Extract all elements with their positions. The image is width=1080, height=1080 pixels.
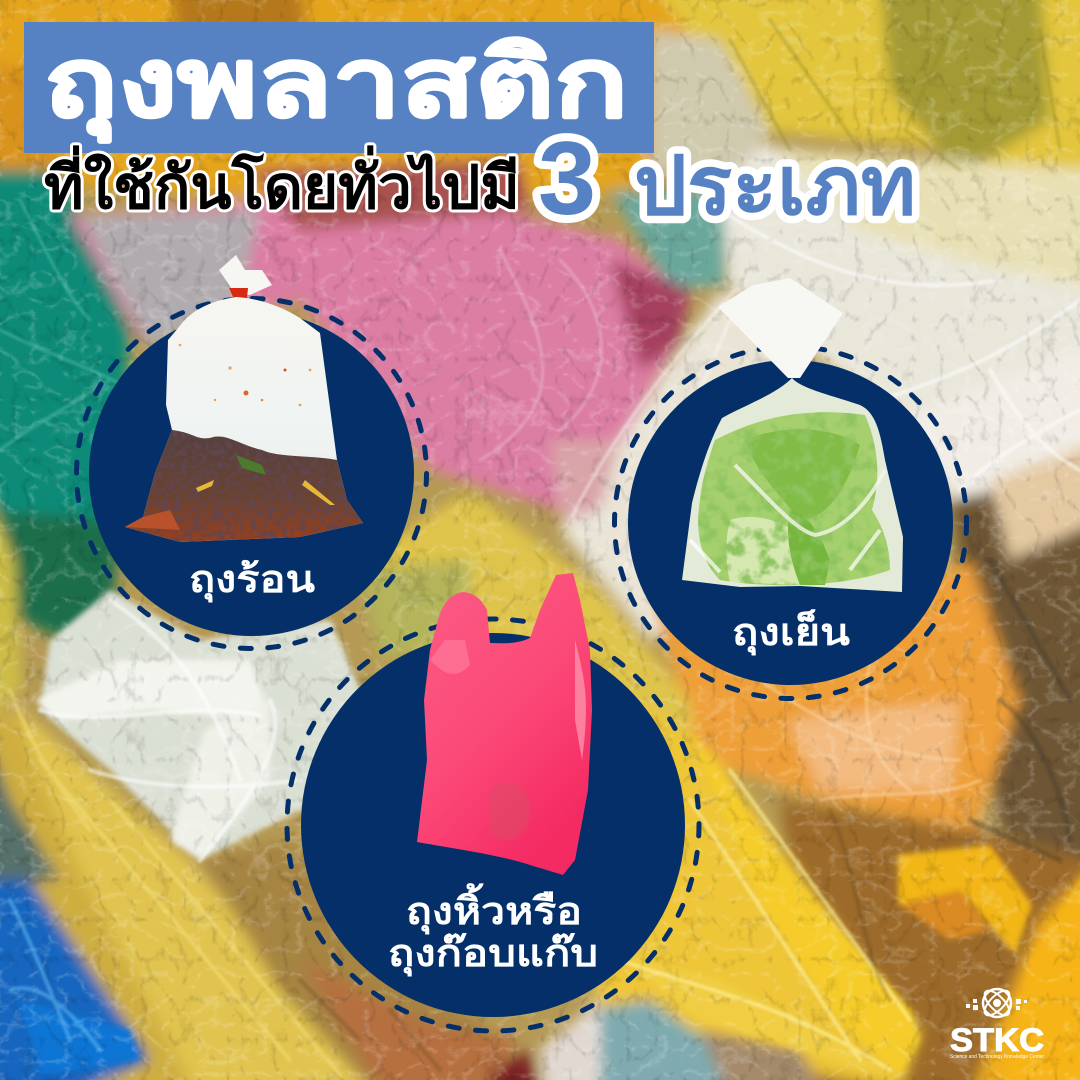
circle: cold bag <box>628 360 953 685</box>
icon: cold bag with lettuce <box>682 278 903 595</box>
subtitle: black text with white outline: ที่ใช้กันโดยทั่วไปมี <box>44 145 520 221</box>
subtitle: ประเภท: ประเภท <box>634 141 916 232</box>
icon: atom network emblem <box>966 987 1027 1019</box>
panel: hot bag <box>76 255 426 648</box>
icon: hot bag with food <box>120 255 370 545</box>
wordmark: STKC <box>950 1022 1044 1058</box>
label: ถุงหิ้วหรือ: ถุงหิ้วหรือ <box>406 883 582 935</box>
circle: carrier bag <box>301 633 685 1017</box>
label: ถุงก๊อบแก๊บ: ถุงก๊อบแก๊บ <box>388 933 598 977</box>
label: ถุงร้อน: ถุงร้อน <box>189 559 315 603</box>
dashed ring: hot bag <box>76 298 426 648</box>
title: main heading: ถุงพลาสติก <box>44 30 628 143</box>
label: ถุงเย็น: ถุงเย็น <box>732 609 850 656</box>
panel: carrier bag <box>287 573 699 1031</box>
icon: pink carrier bag <box>417 573 592 875</box>
circle: hot bag <box>89 311 414 636</box>
tagline: Science and Technology Knowledge Center <box>950 1054 1044 1060</box>
dashed ring: carrier bag <box>287 619 699 1031</box>
dashed ring: cold bag <box>614 346 966 698</box>
panel: cold bag <box>614 278 966 698</box>
subtitle: number 3: 3 <box>538 121 596 237</box>
logo: STKC <box>950 987 1044 1060</box>
title background: blue banner <box>24 22 654 153</box>
